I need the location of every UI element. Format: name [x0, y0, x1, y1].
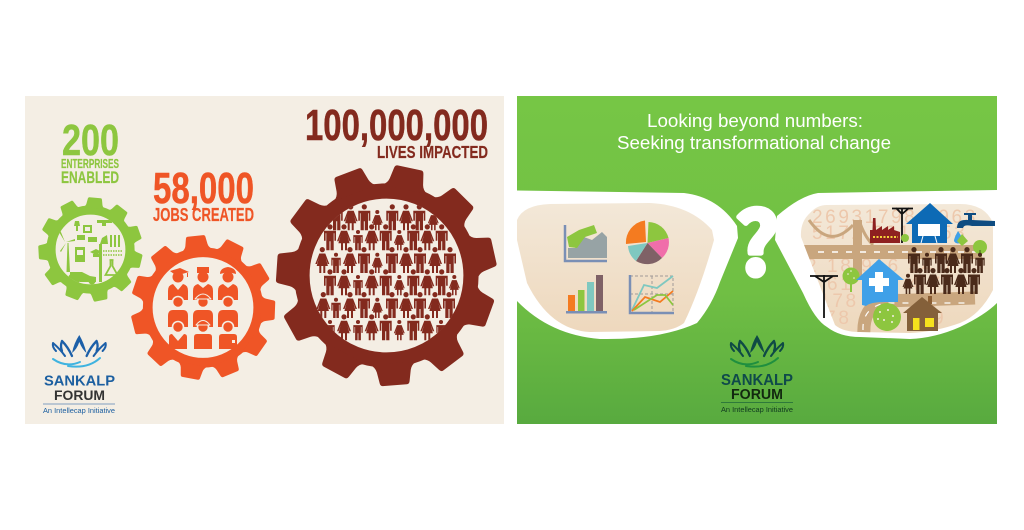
- panel: looking beyond numbers: [517, 96, 997, 424]
- icon: factory: [870, 218, 900, 243]
- background numbers: 2 18 916 34 7: [806, 256, 956, 277]
- logo: Sankalp Forum, right: An Intellecap Initiative: [721, 407, 793, 414]
- heading: 100,000,000 lives impacted: LIVES IMPACTED: [377, 142, 488, 162]
- icon: trees and bushes: [842, 234, 987, 331]
- logo: Sankalp Forum, right: FORUM: [731, 387, 783, 403]
- logo: Sankalp Forum, left: FORUM: [54, 387, 105, 403]
- icon: question mark: ?: [735, 175, 779, 300]
- line chart: [630, 275, 674, 313]
- heading: 100,000,000 lives impacted: [305, 101, 488, 162]
- heading: 100,000,000 lives impacted: 100,000,000: [305, 101, 488, 150]
- pie chart: [626, 220, 669, 264]
- heading: 58,000 jobs created: 58,000: [153, 164, 254, 213]
- logo: Sankalp Forum, left: [43, 335, 115, 415]
- left lens with charts: [517, 203, 714, 332]
- title: Seeking transformational change: [617, 133, 891, 153]
- heading: 200 enterprises enabled: ENABLED: [61, 168, 119, 187]
- row 2 workers: [168, 294, 238, 327]
- icon: dark red gear with crowd: [275, 163, 499, 387]
- icon: utility pole: [892, 208, 913, 243]
- background numbers: 8 61 592 4 7: [806, 274, 943, 295]
- background numbers: 478 152 189: [812, 308, 946, 329]
- background numbers: 26931798 4963: [812, 207, 978, 228]
- title: Looking beyond numbers:: [647, 111, 863, 131]
- row 1 workers: [168, 267, 238, 300]
- icon: water tap: [954, 213, 995, 243]
- roads: [798, 220, 982, 336]
- background numbers: 5172 681 4 53: [812, 223, 967, 244]
- area chart: [565, 225, 607, 261]
- background numbers: 5178 369 24: [806, 291, 940, 312]
- icon: green gear with enterprise icons: [38, 197, 144, 303]
- crowd of people: [315, 204, 460, 340]
- icon: community people: [903, 247, 985, 294]
- panel: impact statistics: [25, 96, 504, 424]
- background numbers: [806, 207, 978, 329]
- logo: Sankalp Forum, right: SANKALP: [721, 372, 793, 389]
- title: [617, 111, 891, 153]
- heading: 200 enterprises enabled: 200: [62, 116, 119, 165]
- heading: 200 enterprises enabled: ENTERPRISES: [61, 157, 119, 171]
- logo: Sankalp Forum, left: SANKALP: [44, 374, 115, 390]
- icon: second utility pole: [810, 275, 838, 318]
- heading: 58,000 jobs created: [153, 164, 254, 225]
- bar chart: [566, 275, 607, 314]
- icon: school house: [906, 203, 953, 243]
- logo: Sankalp Forum, right: [721, 335, 793, 414]
- heading: 200 enterprises enabled: [61, 116, 119, 187]
- right lens with community scene: [798, 203, 995, 336]
- row 3 workers: [169, 320, 237, 349]
- icon: clinic: [856, 259, 904, 306]
- icon: glasses frame: [517, 190, 997, 339]
- icon: brown house: [903, 296, 942, 331]
- workers grid: [168, 267, 238, 349]
- icon: orange gear with workers: [130, 234, 276, 381]
- heading: 58,000 jobs created: JOBS CREATED: [153, 204, 254, 225]
- logo: Sankalp Forum, left: An Intellecap Initiative: [43, 408, 115, 415]
